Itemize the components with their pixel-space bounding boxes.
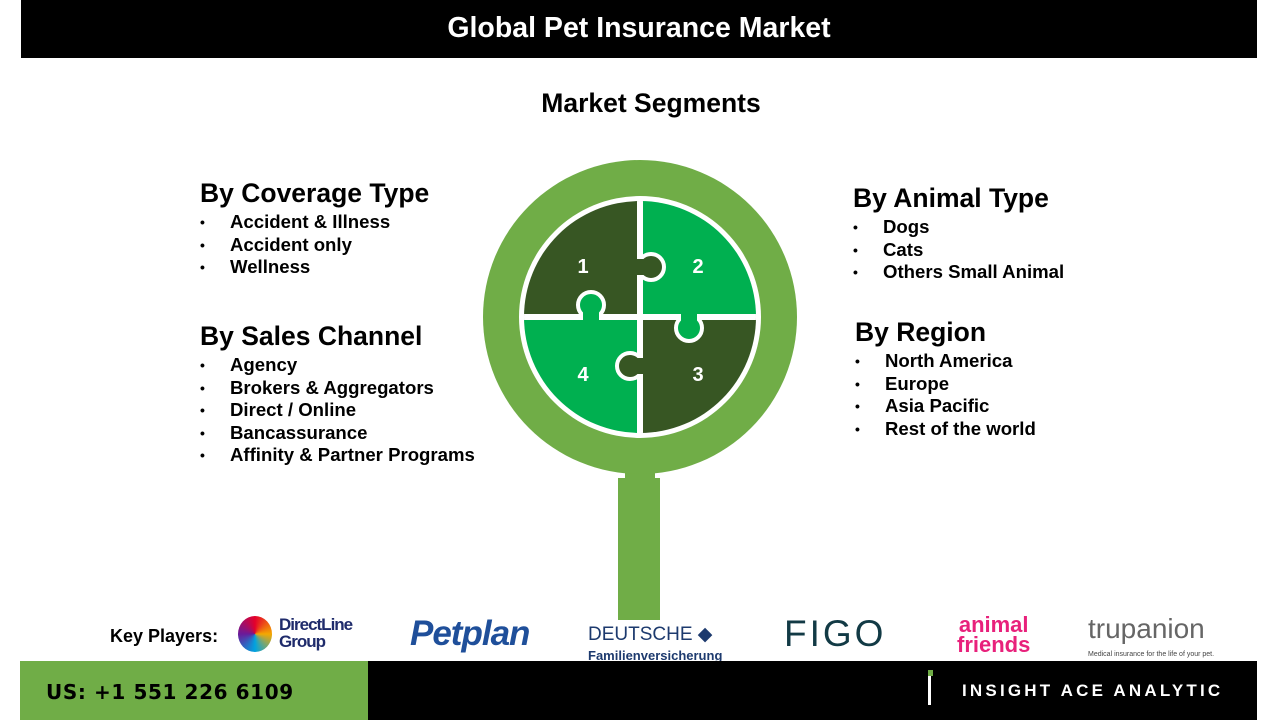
panel: coverage type: By Coverage Type — [200, 178, 429, 208]
panel: sales channel: Bancassurance — [230, 422, 367, 442]
panel: sales channel: Agency — [230, 354, 297, 375]
logo: animal friends: friends — [957, 632, 1030, 657]
icon: magnifier with puzzle: 4 — [577, 364, 589, 386]
panel: sales channel — [200, 321, 475, 465]
panel: region — [855, 317, 1036, 438]
logo: trupanion — [1088, 613, 1214, 658]
panel: region: North America — [885, 350, 1012, 371]
logo: animal friends: animal — [959, 612, 1029, 637]
footer: phone — [20, 661, 368, 720]
header bar: Global Pet Insurance Market — [447, 12, 831, 44]
key players label: Key Players: — [110, 626, 218, 646]
panel: region: By Region — [855, 317, 986, 347]
panel: animal type — [853, 183, 1064, 282]
icon: magnifier with puzzle: 2 — [692, 256, 704, 278]
panel: sales channel: Brokers & Aggregators — [230, 376, 434, 398]
panel: coverage type: Accident & Illness — [230, 211, 390, 232]
footer: brand — [368, 661, 1257, 720]
logo: Direct Line — [238, 615, 352, 652]
icon: magnifier with puzzle: 3 — [692, 364, 704, 386]
footer: brand: INSIGHT ACE ANALYTIC — [962, 681, 1223, 700]
panel: coverage type — [200, 178, 429, 277]
logo: Petplan: Petplan — [410, 614, 529, 653]
icon: magnifier with puzzle — [483, 160, 797, 620]
panel: region: Asia Pacific — [885, 395, 989, 416]
panel: coverage type: Accident only — [230, 234, 352, 254]
logo: Deutsche: DEUTSCHE ◆ — [588, 624, 712, 645]
panel: region: Europe — [885, 372, 949, 394]
logo: trupanion: Medical insurance for the life of your pet. — [1088, 651, 1214, 658]
panel: animal type: By Animal Type — [853, 183, 1049, 213]
subtitle: Market Segments — [541, 88, 761, 118]
panel: coverage type: Wellness — [230, 256, 310, 277]
logo: animal friends — [957, 612, 1030, 657]
logo: Deutsche: Familienversicherung — [588, 648, 722, 663]
logo: Direct Line: Group — [279, 632, 325, 651]
panel: sales channel: Direct / Online — [230, 399, 356, 420]
logo: trupanion: trupanion — [1088, 613, 1205, 644]
panel: animal type: Cats — [883, 238, 923, 260]
footer: phone: US: +1 551 226 6109 — [46, 680, 294, 704]
logo: Deutsche — [588, 624, 722, 663]
panel: animal type: Dogs — [883, 216, 929, 237]
logo: Direct Line: DirectLine — [279, 615, 352, 634]
icon: magnifier with puzzle: 1 — [577, 256, 589, 278]
panel: sales channel: By Sales Channel — [200, 321, 422, 351]
header bar — [21, 0, 1257, 58]
panel: sales channel: Affinity & Partner Programs — [230, 444, 475, 465]
panel: animal type: Others Small Animal — [883, 261, 1064, 282]
logo: FIGO: FIGO — [784, 613, 886, 654]
panel: region: Rest of the world — [885, 418, 1036, 438]
